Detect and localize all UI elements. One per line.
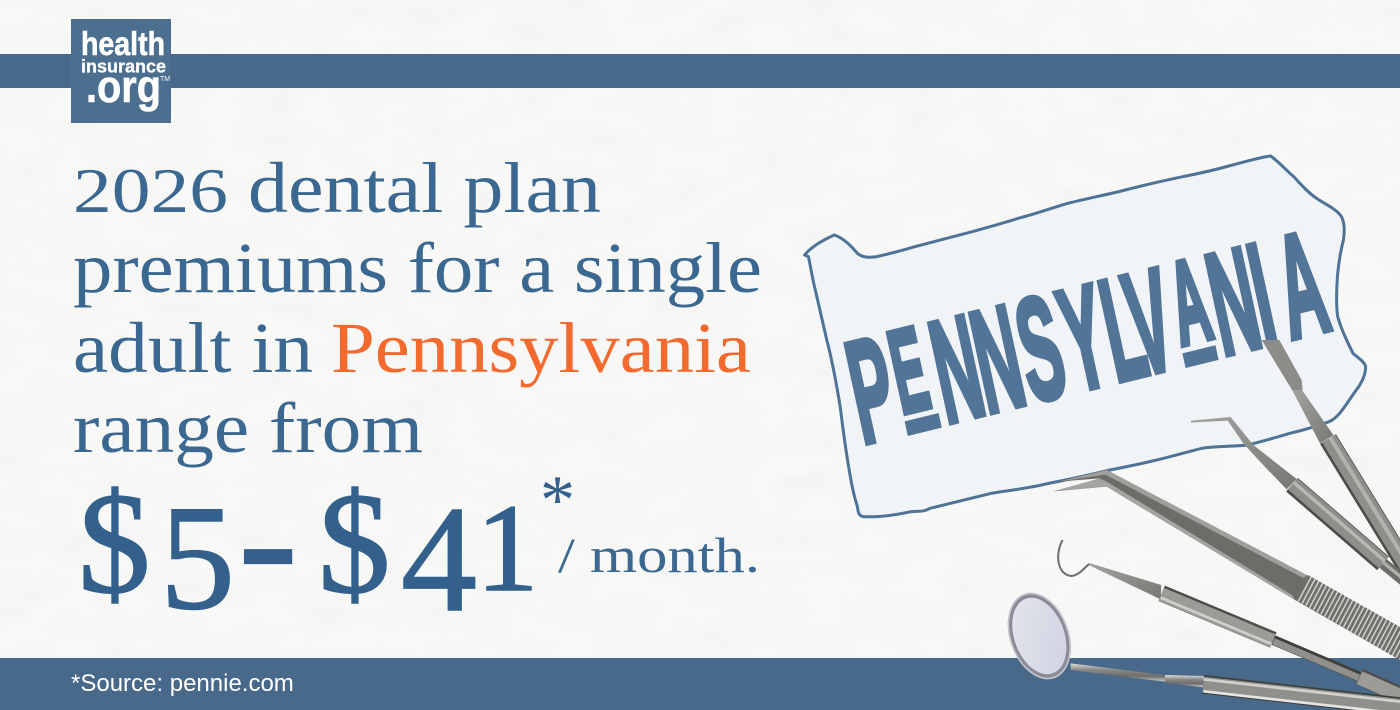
heading: premium statement: premiums for a single	[73, 228, 762, 308]
price range: 1	[476, 480, 538, 618]
state name lettering: A	[1158, 234, 1221, 371]
instrument: tweezers	[1053, 470, 1400, 660]
bottom banner bar	[0, 658, 1400, 710]
heading: premium statement	[73, 148, 762, 468]
heading: premium statement: Pennsylvania	[331, 308, 751, 388]
state name lettering: Y	[1046, 254, 1121, 423]
logo: healthinsurance.org: .org	[86, 61, 161, 112]
logo: healthinsurance.org: insurance	[81, 56, 166, 76]
state name lettering: A	[1263, 200, 1340, 370]
state name lettering: N	[1195, 217, 1272, 386]
heading: premium statement: range from	[73, 388, 423, 468]
asterisk: *	[540, 462, 575, 539]
heading: premium statement: adult in	[73, 308, 313, 388]
per month label: / month.	[558, 527, 760, 583]
Pennsylvania state outline	[805, 156, 1366, 517]
state name lettering: N	[918, 284, 996, 454]
state name lettering: N	[959, 274, 1036, 444]
logo: healthinsurance.org: TM	[160, 76, 170, 83]
price range: $	[78, 464, 150, 624]
state name lettering	[834, 200, 1340, 475]
heading: premium statement: 2026	[73, 156, 228, 226]
source note: *Source: pennie.com	[71, 670, 294, 697]
price range: 4	[401, 475, 477, 643]
state name lettering: P	[834, 306, 909, 475]
price range: $	[318, 464, 390, 624]
price range: -	[238, 439, 298, 638]
instrument: explorer probe	[1191, 417, 1400, 588]
logo: healthinsurance.org	[71, 19, 171, 123]
price range: 5	[160, 475, 235, 641]
instrument: dental mirror	[997, 585, 1400, 710]
heading: premium statement: dental plan	[248, 148, 601, 228]
instrument: sickle probe	[1058, 540, 1400, 702]
logo: healthinsurance.org: health	[81, 25, 165, 62]
instrument: spatula	[1262, 340, 1400, 578]
state name lettering: I	[1236, 213, 1287, 376]
state name lettering: E	[879, 303, 939, 439]
state name lettering: V	[1112, 238, 1186, 407]
state name lettering: S	[1003, 264, 1078, 433]
dental instruments	[997, 340, 1400, 710]
state name lettering: L	[1088, 244, 1159, 413]
top banner bar	[0, 54, 1400, 88]
